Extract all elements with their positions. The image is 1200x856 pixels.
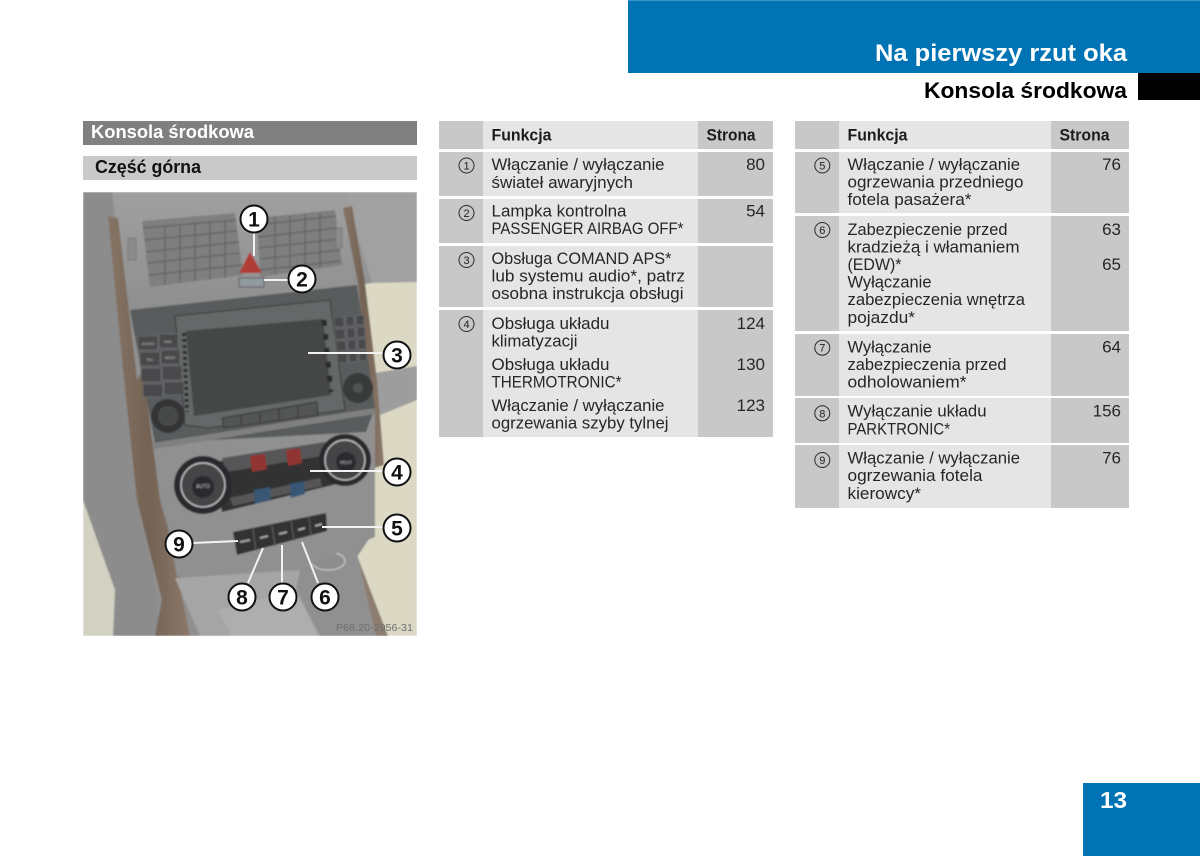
row 8: 156 xyxy=(1093,402,1121,421)
row 9 xyxy=(795,445,1129,508)
row 6: Wyłączanie xyxy=(848,273,932,292)
head unit xyxy=(130,285,375,444)
left buttons: NAV xyxy=(164,339,172,344)
right background xyxy=(355,270,417,636)
cup holder xyxy=(311,552,345,570)
photo: centre console with numbered callouts: AUTO xyxy=(196,484,210,490)
callout 6: 6 xyxy=(319,586,331,610)
row 3: lub systemu audio*, patrz xyxy=(492,267,685,286)
row 1: 1 xyxy=(463,160,470,172)
row 4: 130 xyxy=(737,355,765,374)
callout lines xyxy=(193,233,383,583)
panel heading bar: Konsola środkowa xyxy=(83,121,417,145)
row 7: 64 xyxy=(1102,337,1121,356)
row 3: osobna instrukcja obsługi xyxy=(492,284,684,303)
wood strip right xyxy=(343,206,384,468)
photo: centre console with numbered callouts: REST xyxy=(340,460,352,465)
row 7: 7 xyxy=(819,343,825,355)
callout 4 xyxy=(384,458,410,486)
table left header: Funkcja xyxy=(492,126,552,144)
callout 7: 7 xyxy=(277,586,289,610)
row 5: ogrzewania przedniego xyxy=(848,173,1024,192)
panel subheading bar: Część górna: Część górna xyxy=(95,157,202,177)
row 6: zabezpieczenia wnętrza xyxy=(848,290,1026,309)
left steering area xyxy=(105,192,114,217)
row 3: Obsługa COMAND APS* xyxy=(492,249,672,268)
row 6: 6 xyxy=(819,225,825,237)
section heading: Konsola środkowa xyxy=(924,73,1200,103)
lower centre tunnel xyxy=(180,556,376,636)
left buttons: TEL xyxy=(146,357,154,362)
row 5: fotela pasażera* xyxy=(848,190,972,209)
photo reference code: P68.20-2956-31 xyxy=(336,623,413,634)
seat button row xyxy=(233,513,327,555)
dash top xyxy=(112,192,372,284)
table left header: Strona xyxy=(706,126,756,144)
row 2: 54 xyxy=(746,202,765,221)
callout 4: 4 xyxy=(391,462,403,484)
callout 8: 8 xyxy=(236,586,248,610)
row 1: Włączanie / wyłączanie xyxy=(492,155,664,174)
silver climate panel xyxy=(172,414,376,578)
section heading: Konsola środkowa: Konsola środkowa xyxy=(924,78,1128,103)
table right: functions 5-9 xyxy=(795,121,1129,508)
row 6: 65 xyxy=(1102,255,1121,274)
row 5: 76 xyxy=(1102,155,1121,174)
row 8: PARKTRONIC* xyxy=(848,419,950,438)
page number tab: 13 xyxy=(1100,787,1127,813)
left knob xyxy=(151,399,185,433)
left buttons xyxy=(138,334,184,397)
callout 8 xyxy=(228,584,256,610)
row 6: (EDW)* xyxy=(848,255,902,274)
soft keys xyxy=(222,402,318,428)
header band: blue xyxy=(628,0,1200,73)
hazard button xyxy=(239,252,262,273)
row 3 xyxy=(439,246,773,307)
row 9: 76 xyxy=(1102,448,1121,467)
row 7 xyxy=(795,334,1129,396)
row 4: Włączanie / wyłączanie xyxy=(492,396,664,415)
row 4 xyxy=(439,310,773,437)
row 6: kradzieżą i włamaniem xyxy=(848,237,1020,256)
row 2: Lampka kontrolna xyxy=(492,202,627,221)
row 7: Wyłączanie xyxy=(848,337,932,356)
row 2 xyxy=(439,199,773,243)
row 6: Zabezpieczenie przed xyxy=(848,220,1008,239)
haze xyxy=(124,212,374,634)
callout 5 xyxy=(384,514,410,542)
row 4: 4 xyxy=(463,319,470,331)
callout 3 xyxy=(384,342,410,368)
row 9: 9 xyxy=(819,455,825,467)
callout 1: 1 xyxy=(248,208,260,232)
wood strip left xyxy=(108,216,190,636)
row 7: odholowaniem* xyxy=(848,372,967,391)
row 4: Obsługa układu xyxy=(492,355,610,374)
row 8 xyxy=(795,398,1129,443)
row 5: 5 xyxy=(819,160,825,172)
panel subheading bar: Część górna xyxy=(83,156,417,180)
panel heading bar: Konsola środkowa: Konsola środkowa xyxy=(91,122,255,142)
table right header xyxy=(795,121,1129,149)
table left: functions 1-4 xyxy=(439,121,773,437)
callout 6 xyxy=(312,584,338,610)
callout 2: 2 xyxy=(296,268,308,292)
row 4: ogrzewania szyby tylnej xyxy=(492,414,668,432)
row 4: THERMOTRONIC* xyxy=(492,373,622,392)
row 4: Obsługa układu xyxy=(492,314,610,333)
row 9: kierowcy* xyxy=(848,484,921,503)
callout 9: 9 xyxy=(173,534,185,556)
keypad xyxy=(334,315,367,363)
climate knobs xyxy=(174,456,232,514)
header title: Na pierwszy rzut oka xyxy=(875,40,1128,67)
vents xyxy=(128,210,342,287)
left buttons: AUDIO xyxy=(142,341,154,346)
row 7: zabezpieczenia przed xyxy=(848,355,1006,374)
callout 3: 3 xyxy=(391,344,403,368)
callout 1 xyxy=(240,206,268,232)
climate strip xyxy=(219,456,336,512)
head unit side strips xyxy=(184,333,187,412)
row 4: klimatyzacji xyxy=(492,332,578,351)
row 1: 80 xyxy=(746,155,765,174)
row 1 xyxy=(439,152,773,196)
row 5: Włączanie / wyłączanie xyxy=(848,155,1020,174)
table right header: Strona xyxy=(1060,126,1110,144)
photo: centre console with numbered callouts xyxy=(83,192,417,636)
row 1: świateł awaryjnych xyxy=(492,173,633,192)
callout 5: 5 xyxy=(391,518,403,540)
row 6: 63 xyxy=(1102,220,1121,239)
row 8: Wyłączanie układu xyxy=(848,402,986,421)
row 8: 8 xyxy=(819,408,825,420)
row 2: 2 xyxy=(463,208,470,220)
row 5 xyxy=(795,152,1129,213)
row 4: 123 xyxy=(737,396,765,415)
row 9: Włączanie / wyłączanie xyxy=(848,448,1020,467)
table left header xyxy=(439,121,773,149)
callout 2 xyxy=(288,266,316,292)
row 3: 3 xyxy=(463,255,470,267)
table right header: Funkcja xyxy=(848,126,908,144)
callout 7 xyxy=(270,584,296,610)
row 2: PASSENGER AIRBAG OFF* xyxy=(492,219,684,238)
callout 9 xyxy=(166,530,192,558)
page number tab xyxy=(1083,783,1200,856)
row 6: pojazdu* xyxy=(848,308,915,327)
row 6 xyxy=(795,216,1129,331)
row 4: 124 xyxy=(737,314,765,333)
left buttons: SERV xyxy=(165,355,176,360)
row 9: ogrzewania fotela xyxy=(848,466,983,485)
nav controller xyxy=(343,373,373,403)
